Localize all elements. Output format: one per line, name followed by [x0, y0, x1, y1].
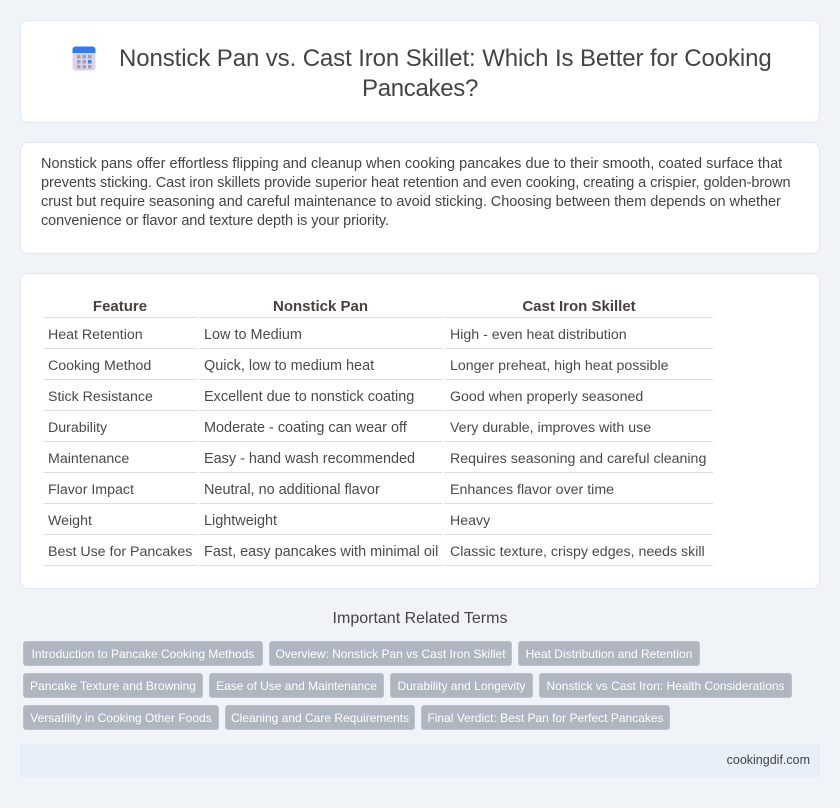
- row: stick resistance: Excellent due to nonstick coating: [204, 389, 414, 405]
- title: Pancakes?: [362, 75, 478, 102]
- row: flavor impact: Neutral, no additional flavor: [204, 482, 380, 498]
- title: [119, 45, 772, 102]
- row: stick resistance: Stick Resistance: [48, 389, 153, 405]
- row: flavor impact: [43, 482, 713, 504]
- icon: calendar: [72, 46, 96, 70]
- tag: [225, 705, 415, 730]
- tag: Final Verdict: Best Pan for Perfect Pancakes: [427, 711, 664, 725]
- tag: Pancake Texture and Browning: [30, 679, 196, 693]
- row: maintenance: Requires seasoning and careful cleaning: [450, 451, 706, 467]
- table header: [43, 298, 713, 318]
- row: cooking method: Quick, low to medium heat: [204, 358, 374, 374]
- row: weight: Heavy: [450, 513, 490, 529]
- tag: Overview: Nonstick Pan vs Cast Iron Skillet: [275, 647, 506, 661]
- comparison table: [43, 298, 713, 566]
- tag: [539, 673, 792, 698]
- tag: [23, 705, 219, 730]
- row: stick resistance: [43, 389, 713, 411]
- row: cooking method: [43, 358, 713, 380]
- table header: Feature: [93, 298, 147, 315]
- intro text: prevents sticking. Cast iron skillets provide superior heat retention and even cooking, creating a crispier, golden-brown: [41, 175, 791, 191]
- tag: Nonstick vs Cast Iron: Health Considerations: [546, 679, 785, 693]
- tag: [23, 641, 263, 666]
- row: durability: [43, 420, 713, 442]
- tag: [518, 641, 700, 666]
- tag: Ease of Use and Maintenance: [216, 679, 377, 693]
- row: durability: Moderate - coating can wear off: [204, 420, 407, 436]
- row: flavor impact: Flavor Impact: [48, 482, 134, 498]
- table header: Nonstick Pan: [273, 298, 368, 315]
- row: cooking method: Cooking Method: [48, 358, 151, 374]
- tag: Cleaning and Care Requirements: [231, 711, 409, 725]
- comparison table panel: [20, 273, 820, 589]
- row: weight: Lightweight: [204, 513, 277, 529]
- tag: Heat Distribution and Retention: [526, 647, 692, 661]
- footer source text: cookingdif.com: [727, 753, 810, 767]
- related terms heading: Important Related Terms: [333, 610, 507, 627]
- row: heat retention: Low to Medium: [204, 327, 302, 343]
- tag: [269, 641, 512, 666]
- row: maintenance: [43, 451, 713, 473]
- intro text: convenience or flavor and texture depth is your priority.: [41, 213, 389, 229]
- tag: [421, 705, 670, 730]
- intro panel: [20, 142, 820, 254]
- footer bar: [20, 744, 820, 778]
- row: maintenance: Easy - hand wash recommended: [204, 451, 415, 467]
- row: weight: [43, 513, 713, 535]
- title: Nonstick Pan vs. Cast Iron Skillet: Which Is Better for Cooking: [119, 45, 772, 72]
- row: durability: Very durable, improves with use: [450, 420, 651, 436]
- tag: Versatility in Cooking Other Foods: [30, 711, 212, 725]
- row: best use for pancakes: Classic texture, crispy edges, needs skill: [450, 544, 705, 560]
- row: durability: Durability: [48, 420, 107, 436]
- tag: Durability and Longevity: [397, 679, 526, 693]
- table header: Cast Iron Skillet: [522, 298, 636, 315]
- tag: [390, 673, 533, 698]
- tag: Introduction to Pancake Cooking Methods: [32, 647, 254, 661]
- intro text: Nonstick pans offer effortless flipping and cleanup when cooking pancakes due to their smooth, coated surface that: [41, 156, 782, 172]
- row: cooking method: Longer preheat, high heat possible: [450, 358, 668, 374]
- row: flavor impact: Enhances flavor over time: [450, 482, 614, 498]
- intro text: crust but require seasoning and careful maintenance to avoid sticking. Choosing between them depends on whether: [41, 194, 781, 210]
- related terms tags: [23, 641, 792, 730]
- header panel: [20, 20, 820, 123]
- row: heat retention: [43, 327, 713, 349]
- tag: [209, 673, 384, 698]
- row: maintenance: Maintenance: [48, 451, 129, 467]
- row: best use for pancakes: Best Use for Pancakes: [48, 544, 192, 560]
- intro text: [41, 156, 791, 229]
- row: heat retention: High - even heat distribution: [450, 327, 627, 343]
- tag: [23, 673, 203, 698]
- row: weight: Weight: [48, 513, 92, 529]
- row: best use for pancakes: Fast, easy pancakes with minimal oil: [204, 544, 438, 560]
- row: best use for pancakes: [43, 544, 713, 566]
- row: heat retention: Heat Retention: [48, 327, 143, 343]
- row: stick resistance: Good when properly seasoned: [450, 389, 643, 405]
